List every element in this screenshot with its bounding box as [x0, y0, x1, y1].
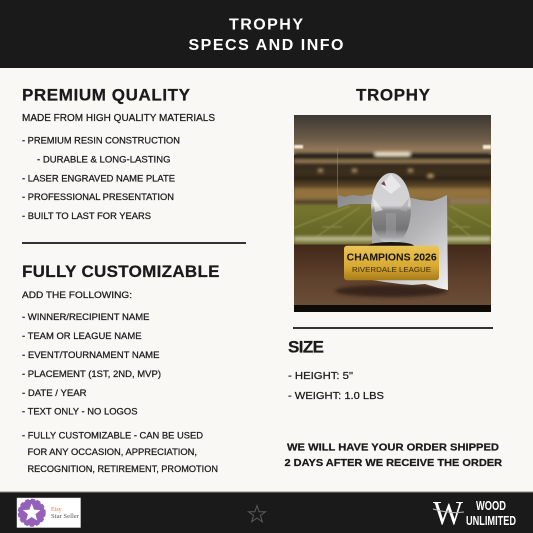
trophy photo	[294, 115, 491, 312]
gold name plate	[344, 246, 439, 280]
customization list	[22, 312, 161, 418]
stadium details	[294, 152, 491, 244]
heading: size: SIZE	[288, 338, 324, 357]
customization note: - FULLY CUSTOMIZABLE - CAN BE USED	[22, 430, 203, 442]
field lines	[294, 206, 491, 237]
shipping note	[284, 442, 502, 469]
feature list: - DURABLE & LONG-LASTING	[37, 154, 170, 165]
customization list: - EVENT/TOURNAMENT NAME	[22, 350, 160, 361]
header title	[188, 16, 344, 54]
feature list	[22, 135, 180, 222]
logo: wood unlimited	[433, 495, 516, 532]
customization note	[22, 430, 218, 475]
header title: SPECS AND INFO	[188, 37, 344, 54]
header title: TROPHY	[229, 16, 303, 33]
feature list: - LASER ENGRAVED NAME PLATE	[22, 173, 175, 184]
shipping note: WE WILL HAVE YOUR ORDER SHIPPED	[287, 442, 499, 454]
customization list: - DATE / YEAR	[22, 388, 87, 399]
heading: trophy: TROPHY	[356, 86, 431, 104]
heading: fully customizable: FULLY CUSTOMIZABLE	[22, 262, 220, 281]
weight spec: - WEIGHT: 1.0 LBS	[288, 390, 384, 402]
feature list: - BUILT TO LAST FOR YEARS	[22, 211, 151, 222]
panel: size	[288, 338, 384, 402]
customization list: - WINNER/RECIPIENT NAME	[22, 312, 150, 323]
height spec: - HEIGHT: 5"	[288, 370, 353, 382]
badge: etsy star seller	[17, 498, 80, 528]
customization list: - PLACEMENT (1ST, 2ND, MVP)	[22, 369, 161, 380]
logo: wood unlimited: W	[433, 495, 464, 532]
feature list: - PROFESSIONAL PRESENTATION	[22, 192, 174, 203]
customization note: FOR ANY OCCASION, APPRECIATION,	[28, 447, 197, 458]
icon: star outline	[248, 506, 266, 522]
footer band	[0, 492, 533, 533]
panel: premium quality	[22, 86, 215, 222]
customization list: - TEAM OR LEAGUE NAME	[22, 331, 142, 342]
logo: wood unlimited: UNLIMITED	[466, 514, 516, 528]
gold name plate: RIVERDALE LEAGUE	[352, 265, 431, 274]
customization list: - TEXT ONLY - NO LOGOS	[22, 407, 138, 418]
header band	[0, 0, 533, 68]
subheading: materials: MADE FROM HIGH QUALITY MATERIALS	[22, 112, 215, 124]
customization note: RECOGNITION, RETIREMENT, PROMOTION	[28, 464, 218, 475]
crystal football	[371, 173, 411, 245]
table shadow	[335, 285, 447, 297]
heading: premium quality: PREMIUM QUALITY	[22, 86, 191, 104]
trophy base	[368, 242, 414, 246]
shipping note: 2 DAYS AFTER WE RECEIVE THE ORDER	[284, 457, 502, 469]
badge: etsy star seller: Etsy	[51, 507, 62, 513]
badge: etsy star seller: Star Seller	[51, 514, 79, 520]
subheading: add the following: ADD THE FOLLOWING:	[22, 290, 132, 301]
panel: fully customizable	[22, 262, 220, 475]
feature list: - PREMIUM RESIN CONSTRUCTION	[22, 135, 180, 146]
logo: wood unlimited: WOOD	[476, 499, 506, 513]
torn paper cutout	[338, 194, 448, 290]
gold name plate: CHAMPIONS 2026	[347, 252, 437, 263]
stadium lights	[294, 145, 491, 149]
